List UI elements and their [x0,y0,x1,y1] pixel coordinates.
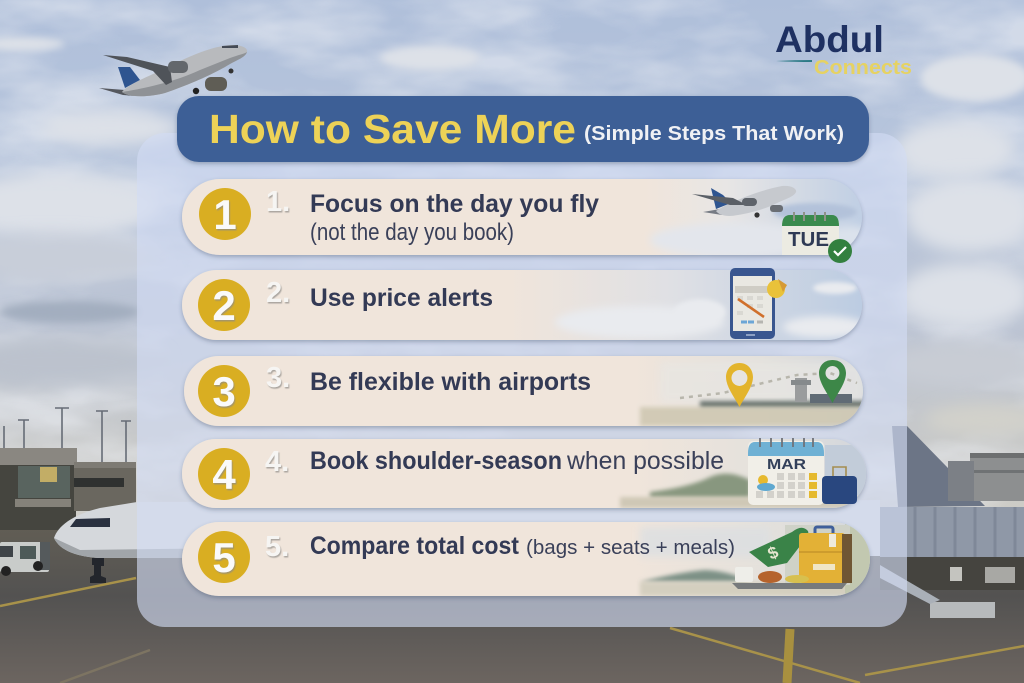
step 5 row [182,522,871,596]
step 3 badge [198,365,250,417]
sun and cloud [757,475,775,491]
step 4 row [182,438,870,508]
row 5 landscape [640,522,871,596]
step 2 badge [198,279,250,331]
plane: top left [99,45,247,96]
logo swoosh [776,60,812,62]
step 5 numeral: 5 [212,534,236,581]
step 1 heading: Focus on the day you fly [310,190,599,218]
sky [0,0,1024,530]
icon: plane [692,186,796,218]
step 5 heading: Compare total cost [310,532,520,560]
icon: yellow pin [726,363,753,407]
step 4 ordinal: 4. [265,446,289,478]
step 3 row [184,356,865,426]
row 3 airport strip [640,362,865,426]
step 3 numeral: 3 [212,368,236,415]
calendar label: TUE [788,229,829,251]
terminal building [0,448,136,530]
step 1 badge [199,188,251,240]
step 1 note: (not the day you book) [310,219,514,246]
tail fin [892,426,985,507]
parked airliner [54,500,880,583]
step 3 heading: Be flexible with airports [310,368,591,396]
icon: price tag: $ [765,542,782,564]
jet bridge [880,507,1024,618]
step 1 row [182,179,875,263]
step 2 heading: Use price alerts [310,284,493,312]
step 2 row [182,268,867,340]
check badge [828,239,852,263]
step 5 note: (bags + seats + meals) [526,537,735,559]
step 4 note: when possible [566,447,724,475]
calendar grid [756,473,817,498]
clouds [0,0,1024,525]
step 1 numeral: 1 [213,191,237,238]
step 4 badge [198,448,250,500]
logo word: Abdul: Abdul [775,19,884,60]
step 2 numeral: 2 [212,282,236,329]
step 4 heading: Book shoulder-season [310,447,562,475]
row 2 clouds [555,282,867,338]
right building [948,453,1024,501]
title banner [177,96,869,162]
icon: calendar MAR [748,438,824,505]
icon: phone with alert [730,268,787,339]
icon: green pin [819,360,846,403]
step 2 ordinal: 2. [266,277,290,309]
step 3 ordinal: 3. [266,362,290,394]
ground vehicle [0,542,50,576]
row 4 landscape [620,445,870,508]
icon: calendar TUE [782,212,852,263]
ground [0,525,1024,683]
runway lines [0,578,1024,683]
icon: meal tray [732,567,847,589]
icon: suitcase [822,467,857,504]
step 4 numeral: 4 [212,451,236,498]
calendar label: MAR [767,456,806,473]
icon: luggage [799,527,852,583]
light poles [4,408,131,465]
step 5 badge [198,531,250,583]
logo word: Connects: Connects [814,57,912,79]
row 1 clouds [652,202,860,253]
step 1 ordinal: 1. [266,186,290,218]
subtitle text: (Simple Steps That Work) [584,123,844,145]
icon: price tag [749,528,808,567]
logo [775,19,912,79]
title text: How to Save More [209,106,576,152]
panel: glass card [137,133,907,627]
step 5 ordinal: 5. [265,531,289,563]
